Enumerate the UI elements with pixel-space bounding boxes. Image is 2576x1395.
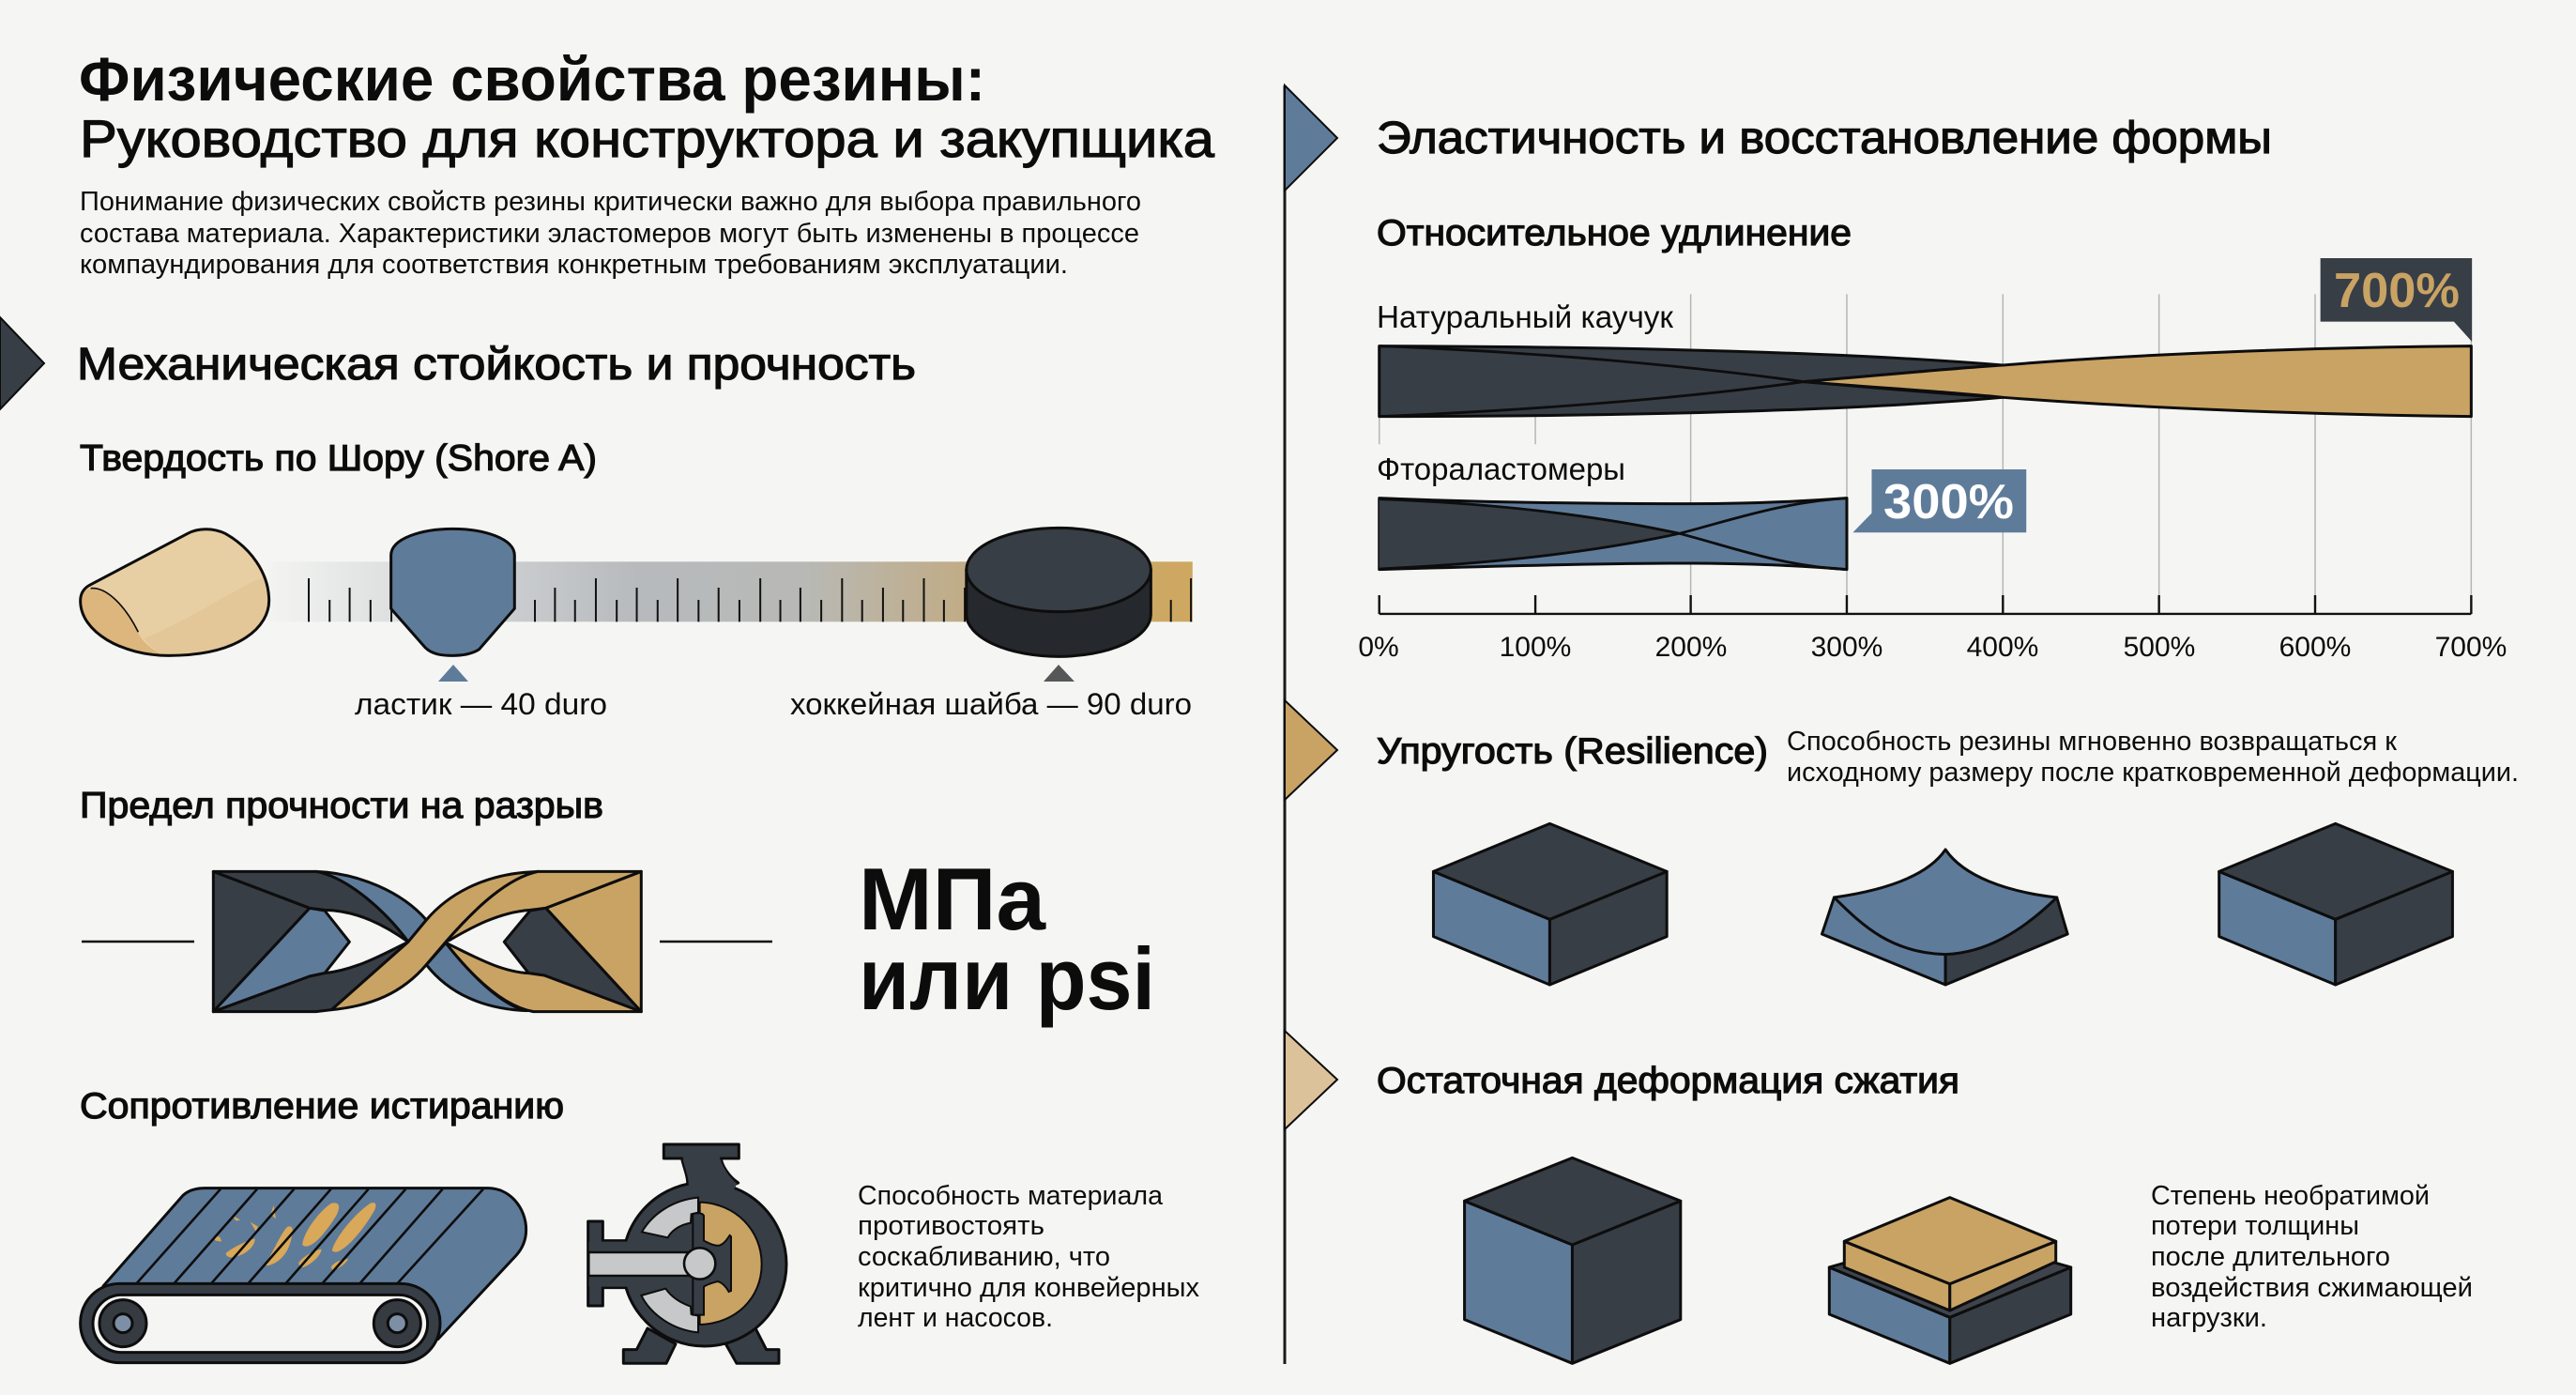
axis labels: 400% [1967, 632, 2038, 663]
section marker [1285, 700, 1337, 800]
bar: natural rubber [1379, 346, 2471, 417]
callout shape: 700% [2321, 258, 2472, 342]
subheading: tensile strength: Предел прочности на разрыв [80, 786, 603, 826]
section marker [1285, 85, 1337, 191]
icon: conveyor belt [81, 1188, 526, 1363]
axis [1379, 595, 2471, 614]
label: natural rubber: Натуральный каучук [1377, 299, 1674, 334]
title: Руководство для конструктора и закупщика [80, 109, 1215, 168]
axis labels: 600% [2279, 632, 2351, 663]
description: нагрузки. [2151, 1303, 2267, 1333]
subheading: Shore hardness: Твердость по Шору (Shore A) [80, 438, 597, 479]
axis labels [1358, 632, 2507, 663]
grid lines [1379, 294, 2471, 595]
description: Степень необратимой [2151, 1181, 2430, 1211]
icon: original cube [1433, 823, 1667, 985]
text: abrasion description: критично для конвейерных [858, 1273, 1199, 1303]
scale band with ticks [268, 561, 1193, 621]
title [79, 44, 1215, 168]
section heading: Эластичность и восстановление формы [1377, 114, 2272, 163]
intro text: компаундирования для соответствия конкретным требованиям эксплуатации. [80, 250, 1068, 280]
description: Способность резины мгновенно возвращаться к [1787, 727, 2397, 757]
unit label: МПа [859, 850, 1046, 948]
unit label: или psi [859, 929, 1155, 1028]
text: abrasion description [858, 1181, 1199, 1333]
subheading: abrasion resistance: Сопротивление истиранию [80, 1086, 564, 1127]
panel: elasticity [1285, 85, 2507, 663]
text: abrasion description: лент и насосов. [858, 1303, 1053, 1333]
icon: twisted rubber under tension [82, 871, 772, 1012]
value: 300%: 300% [1883, 475, 2014, 529]
icon: recovered cube [2219, 823, 2452, 985]
marker: puck [1044, 665, 1075, 682]
axis labels: 100% [1500, 632, 1571, 663]
header block [79, 44, 1215, 280]
intro text: состава материала. Характеристики эластомеров могут быть изменены в процессе [80, 219, 1139, 249]
axis labels: 200% [1655, 632, 1727, 663]
heading: Упругость (Resilience) [1377, 731, 1768, 772]
text: abrasion description: Способность материала [858, 1181, 1164, 1211]
title: Физические свойства резины: [79, 44, 985, 114]
icon: slurry pump [588, 1144, 786, 1363]
column divider [1284, 85, 1286, 1364]
label: eraser: ластик — 40 duro [355, 687, 607, 721]
description: после длительного [2151, 1242, 2390, 1272]
callout shape: 300% [1852, 469, 2026, 532]
description: воздействия сжимающей [2151, 1273, 2473, 1303]
hardness scale [81, 528, 1193, 682]
text: abrasion description: соскабливанию, что [858, 1242, 1110, 1272]
intro text: Понимание физических свойств резины критически важно для выбора правильного [80, 187, 1141, 217]
icon: eraser [391, 529, 514, 655]
label: fluoroelastomers: Фтораластомеры [1377, 452, 1625, 486]
axis labels: 0% [1358, 632, 1399, 663]
intro text [80, 187, 1141, 280]
text: abrasion description: противостоять [858, 1211, 1044, 1241]
icon: compressed cube [1821, 850, 2067, 985]
axis labels: 500% [2124, 632, 2195, 663]
icon: soft rubber cone [81, 529, 269, 655]
unit label [859, 850, 1155, 1028]
heading: Остаточная деформация сжатия [1377, 1061, 1959, 1101]
icon: compressed block under load [1829, 1198, 2071, 1363]
section marker [1285, 1031, 1337, 1129]
panel: compression set [1285, 1031, 2473, 1363]
subheading: elongation: Относительное удлинение [1377, 213, 1852, 253]
description [2151, 1181, 2473, 1333]
label: puck: хоккейная шайба — 90 duro [790, 687, 1192, 721]
value: 700%: 700% [2334, 264, 2460, 318]
icon: hockey puck [967, 528, 1151, 656]
panel: mechanical strength [0, 317, 1199, 1363]
section heading: Механическая стойкость и прочность [77, 340, 916, 390]
chart: relative elongation [1379, 258, 2472, 614]
compression blocks [1465, 1157, 2071, 1363]
description: исходному размеру после кратковременной деформации. [1787, 758, 2519, 788]
description [1787, 727, 2519, 788]
section marker [0, 317, 44, 409]
description: потери толщины [2151, 1211, 2359, 1241]
icon: tall block [1465, 1157, 1681, 1363]
wear marks [214, 1203, 375, 1271]
axis labels: 300% [1811, 632, 1882, 663]
panel: resilience [1285, 700, 2519, 985]
bar: fluoroelastomers [1379, 498, 1847, 570]
axis labels: 700% [2435, 632, 2507, 663]
marker: eraser [438, 665, 468, 682]
resilience cubes [1433, 823, 2452, 985]
